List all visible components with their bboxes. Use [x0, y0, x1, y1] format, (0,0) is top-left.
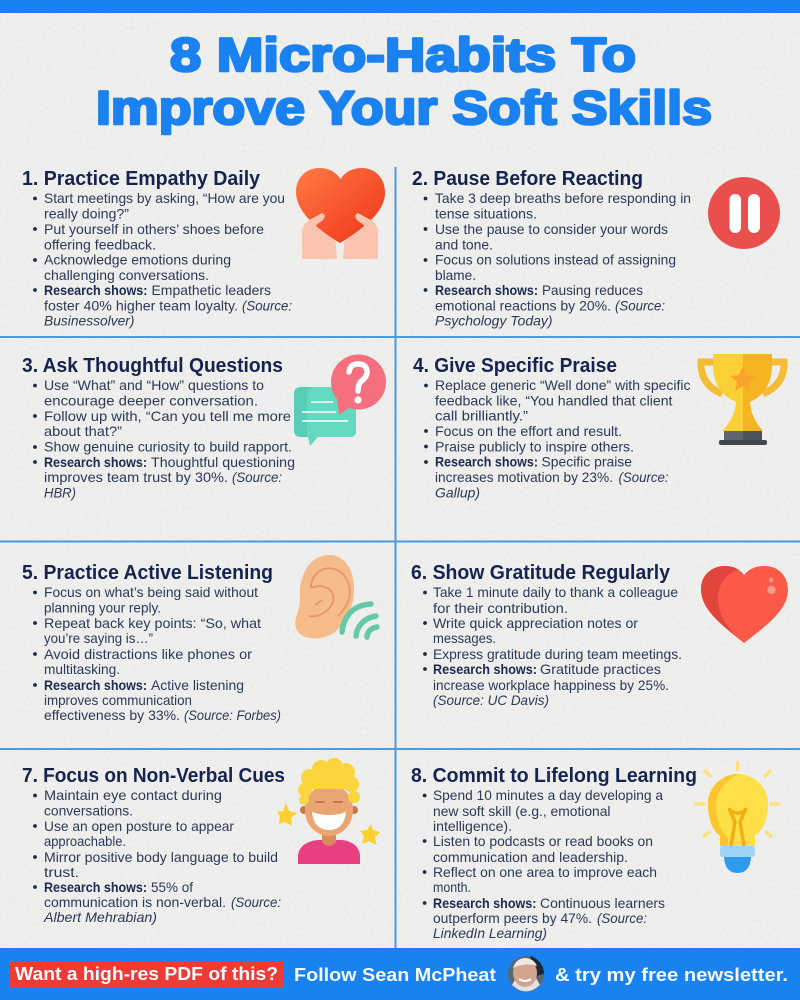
bullet list: habit 6: for their contribution. — [433, 600, 568, 616]
bullet list: habit 3: about that?” — [44, 423, 122, 439]
bullet list: habit 8: new soft skill (e.g., emotional — [433, 803, 610, 819]
bullet list: habit 2: (Source: — [615, 298, 665, 314]
bullet list: habit 3: encourage deeper conversation. — [44, 392, 258, 408]
bullet list: habit 4 — [424, 377, 690, 500]
bullet list: habit 2: and tone. — [435, 236, 493, 252]
bullet list: habit 3: Thoughtful questioning — [151, 454, 295, 470]
bullet list: habit 6: Take 1 minute daily to thank a colleague — [433, 584, 678, 600]
bullet list: habit 8: Spend 10 minutes a day developing a — [433, 787, 663, 803]
bullet list: habit 2: blame. — [435, 267, 476, 283]
bullet list: habit 2: Pausing reduces — [542, 282, 643, 298]
bullet list: habit 8: outperform peers by 47%. — [433, 910, 592, 926]
bullet list: habit 1: Start meetings by asking, “How are you — [44, 190, 285, 206]
bullet list: habit 5: planning your reply. — [44, 600, 161, 616]
bullet list: habit 7: 55% of — [151, 879, 193, 895]
bullet list: habit 6: Research shows: — [433, 661, 537, 677]
bullet list: habit 3: Use “What” and “How” questions to — [44, 377, 264, 393]
curly hair — [298, 758, 360, 805]
bullet list: habit 3 — [33, 377, 295, 500]
bullet list: habit 2: Use the pause to consider your words — [435, 221, 668, 237]
icon: smiling person with stars — [277, 758, 380, 864]
heading: habit 6: 6. Show Gratitude Regularly — [411, 562, 671, 584]
bullet list: habit 7: (Source: — [231, 894, 281, 910]
bullet list: habit 8: Reflect on one area to improve each — [433, 864, 657, 880]
bullet list: habit 4: Specific praise — [542, 454, 632, 470]
heading: habit 4: 4. Give Specific Praise — [413, 355, 617, 377]
bullet list: habit 5: Research shows: — [44, 677, 147, 693]
bullet list: habit 2: Focus on solutions instead of assigning — [435, 252, 676, 268]
bullet list: habit 5: Active listening — [151, 677, 244, 693]
bullet list: habit 5: multitasking. — [44, 661, 120, 677]
bullet list: habit 5: Repeat back key points: “So, what — [44, 615, 261, 631]
bullet list: habit 5: Avoid distractions like phones or — [44, 646, 252, 662]
bullet list: habit 2: Psychology Today) — [435, 312, 552, 328]
heading: habit 2: 2. Pause Before Reacting — [412, 168, 643, 190]
icon: heart held by hands — [296, 168, 385, 259]
bullet list: habit 4: Replace generic “Well done” with specific — [435, 377, 690, 393]
panel: habit 3 — [22, 354, 386, 500]
bullet list: habit 3: HBR) — [44, 484, 76, 500]
title: Improve Your Soft Skills — [96, 81, 712, 134]
icon: speech bubbles with question mark — [294, 354, 386, 446]
bullet list: habit 6: Write quick appreciation notes or — [433, 615, 638, 631]
bullet list: habit 7: conversations. — [44, 802, 133, 818]
bullet list: habit 4: Praise publicly to inspire others. — [435, 438, 634, 454]
bullet list: habit 7: communication is non-verbal. — [44, 894, 226, 910]
bullet list: habit 2: Research shows: — [435, 282, 538, 298]
icon: light bulb — [696, 763, 779, 873]
bullet list: habit 4: Gallup) — [435, 484, 480, 500]
panel: habit 8 — [411, 763, 779, 941]
bullet list: habit 6: Express gratitude during team meetings. — [433, 646, 682, 662]
bullet list: habit 1: Businessolver) — [44, 312, 134, 328]
bullet list: habit 4: Focus on the effort and result. — [435, 423, 622, 439]
newsletter text: & try my free newsletter. — [555, 964, 788, 985]
panel: habit 6 — [411, 562, 788, 708]
panel: habit 2 — [412, 168, 780, 328]
bullet list: habit 7: Albert Mehrabian) — [43, 909, 157, 925]
bullet list: habit 8: (Source: — [597, 910, 647, 926]
heading: habit 1: 1. Practice Empathy Daily — [22, 168, 261, 190]
bullet list: habit 6: (Source: UC Davis) — [433, 692, 549, 708]
bullet list: habit 8: intelligence). — [433, 818, 512, 834]
follow text: Follow Sean McPheat — [294, 964, 496, 985]
bullet list: habit 6 — [423, 584, 682, 708]
bullet list: habit 4: increases motivation by 23%. — [435, 469, 613, 485]
icon: ear with sound waves — [295, 555, 377, 638]
bullet list: habit 2 — [424, 190, 691, 328]
icon: trophy — [701, 354, 784, 445]
bullet list: habit 1: offering feedback. — [44, 236, 156, 252]
bullet list: habit 3: improves team trust by 30%. — [44, 469, 228, 485]
bullet list: habit 6: messages. — [433, 630, 496, 646]
bullet list: habit 4: Research shows: — [435, 454, 538, 470]
bullet list: habit 7: Mirror positive body language to build — [44, 849, 278, 865]
bullet list: habit 7: trust. — [44, 864, 79, 880]
panel: habit 4 — [413, 354, 784, 500]
bullet list: habit 1: Acknowledge emotions during — [44, 252, 231, 268]
panel: habit 5 — [22, 555, 377, 723]
bullet list: habit 1: Put yourself in others’ shoes before — [44, 221, 264, 237]
title: 8 Micro-Habits To — [170, 28, 636, 81]
bullet list: habit 7: Research shows: — [44, 879, 147, 895]
bullet list: habit 5: effectiveness by 33%. — [44, 707, 180, 723]
heading: habit 5: 5. Practice Active Listening — [22, 562, 273, 584]
bullet list: habit 8: LinkedIn Learning) — [433, 925, 547, 941]
icon: pause button — [708, 177, 780, 249]
bullet list: habit 3: (Source: — [232, 469, 282, 485]
bullet list: habit 3: Show genuine curiosity to build rapport. — [44, 438, 292, 454]
bullet list: habit 5: (Source: Forbes) — [184, 707, 281, 723]
bullet list: habit 1: Empathetic leaders — [152, 282, 271, 298]
bullet list: habit 8: Continuous learners — [540, 895, 665, 911]
heading: habit 7: 7. Focus on Non-Verbal Cues — [22, 765, 285, 787]
bullet list: habit 2: emotional reactions by 20%. — [435, 298, 611, 314]
bullet list: habit 8: Listen to podcasts or read books on — [433, 833, 653, 849]
bullet list: habit 8: communication and leadership. — [433, 849, 628, 865]
bullet list: habit 1: really doing?” — [44, 206, 129, 222]
bullet list: habit 7: approachable. — [44, 833, 126, 849]
bullet list: habit 4: call brilliantly.” — [435, 408, 528, 424]
bullet list: habit 6: increase workplace happiness by 25%. — [433, 677, 669, 693]
bullet list: habit 2: tense situations. — [435, 206, 537, 222]
bullet list: habit 7: Use an open posture to appear — [44, 818, 234, 834]
bullet list: habit 7: Maintain eye contact during — [44, 787, 222, 803]
bullet list: habit 4: feedback like, “You handled that client — [435, 392, 673, 408]
bullet list: habit 8: month. — [433, 879, 471, 895]
panel: habit 1 — [22, 168, 385, 328]
bullet list: habit 8: Research shows: — [433, 895, 536, 911]
top bar — [0, 0, 800, 13]
bullet list: habit 5: improves communication — [44, 692, 192, 708]
bullet list: habit 1: challenging conversations. — [44, 267, 209, 283]
footer banner — [0, 948, 800, 1000]
bullet list: habit 3: Research shows: — [44, 454, 147, 470]
bullet list: habit 5 — [33, 584, 281, 723]
bullet list: habit 5: you’re saying is…” — [44, 630, 153, 646]
bullet list: habit 8 — [423, 787, 665, 941]
bullet list: habit 1: (Source: — [242, 298, 292, 314]
bullet list: habit 4: (Source: — [618, 469, 669, 485]
bullet list: habit 6: Gratitude practices — [540, 661, 661, 677]
bullet list: habit 2: Take 3 deep breaths before responding in — [435, 190, 691, 206]
avatar photo — [508, 956, 544, 992]
icon: heart — [701, 566, 788, 643]
panel: habit 7 — [22, 758, 380, 925]
bullet list: habit 5: Focus on what’s being said without — [44, 584, 258, 600]
bullet list: habit 1 — [33, 190, 292, 328]
bullet list: habit 1: foster 40% higher team loyalty. — [44, 298, 238, 314]
heading: habit 8: 8. Commit to Lifelong Learning — [411, 765, 697, 787]
bullet list: habit 7 — [33, 787, 281, 925]
title — [96, 28, 712, 134]
bullet list: habit 3: Follow up with, “Can you tell me more — [44, 408, 291, 424]
bullet list: habit 1: Research shows: — [44, 282, 148, 298]
call to action: red label: Want a high-res PDF of this? — [15, 963, 278, 984]
heading: habit 3: 3. Ask Thoughtful Questions — [22, 355, 283, 377]
